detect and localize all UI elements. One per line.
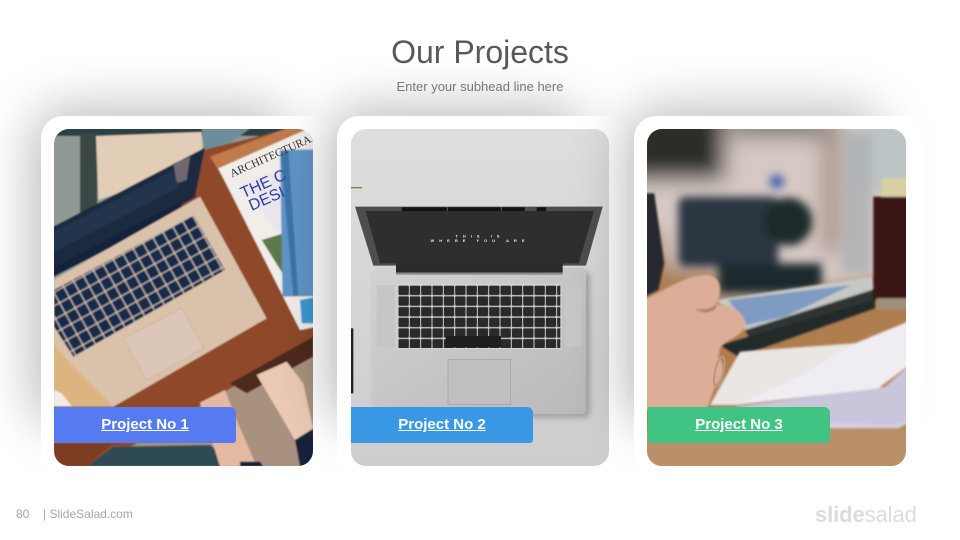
glass [873, 178, 910, 310]
label: project no 3: Project No 3 [695, 416, 783, 433]
card shadow 3 [643, 126, 865, 408]
panel: project 2 [337, 116, 627, 480]
laptop screen [355, 207, 603, 275]
photo: laptop and magazine on wood table: DESI [246, 184, 287, 215]
photo: laptop and magazine on wood table [54, 129, 313, 466]
ring [712, 356, 727, 388]
hand [642, 275, 745, 410]
laptop screen: WHERE YOU ARE [430, 238, 530, 243]
camera [678, 133, 872, 293]
panel: project 1 [41, 116, 331, 480]
laptop screen: THIS IS [455, 233, 505, 238]
photo: laptop and magazine on wood table: THE C [238, 167, 289, 202]
panel: project 3 [634, 116, 924, 480]
logo: slidesalad [815, 502, 917, 527]
trackpad [123, 308, 204, 380]
label: project no 3 [648, 407, 830, 443]
screen [50, 148, 205, 278]
label: project no 1 [54, 407, 236, 443]
subhead: Enter your subhead line here [397, 79, 563, 94]
page number: 80 [16, 507, 29, 521]
title: Our Projects [391, 34, 569, 70]
base [50, 197, 267, 407]
card shadow 1 [50, 126, 272, 408]
label: project no 2 [351, 407, 533, 443]
blurred background [625, 100, 925, 300]
photo: silver laptop from above [351, 129, 609, 466]
label: project no 1: Project No 1 [101, 416, 189, 433]
card shadow 2 [346, 126, 568, 408]
feet [257, 362, 313, 440]
notebook [710, 320, 912, 428]
tablet [717, 277, 877, 357]
photo: hand writing in notebook [647, 129, 906, 466]
phone edge [351, 328, 353, 393]
keyboard [54, 215, 225, 357]
label: project no 2: Project No 2 [398, 416, 486, 433]
laptop base [373, 268, 590, 418]
magazine [218, 129, 317, 330]
pen [645, 193, 664, 297]
plant tip [351, 187, 362, 188]
footer source: | SlideSalad.com [43, 507, 133, 521]
wooden table [625, 277, 925, 483]
